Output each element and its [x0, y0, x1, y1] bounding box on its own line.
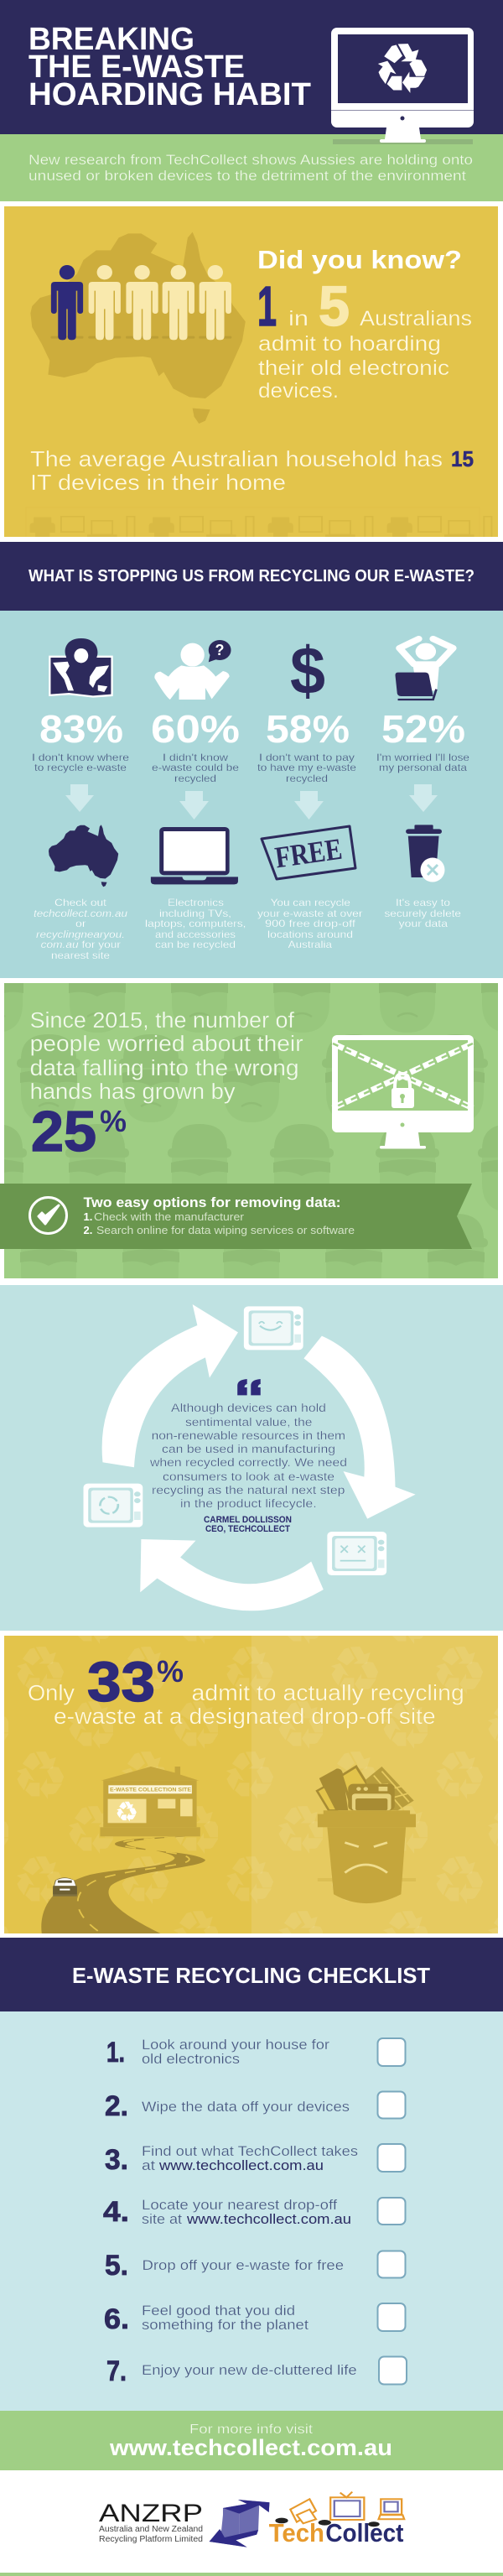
- icon: broken TV: [327, 1532, 386, 1575]
- logo: ANZRP: ANZRP: [99, 2500, 203, 2527]
- item 7: 7.: [106, 2355, 127, 2387]
- stat: 1 in 5 Australians: [257, 275, 472, 403]
- arrows: barrier to solution: [65, 784, 438, 820]
- recycling stat text: Only: [28, 1682, 75, 1705]
- quote text: consumers to look at e-waste: [163, 1470, 334, 1483]
- icon: check circle: [30, 1198, 67, 1233]
- solution text 2: and accessories: [155, 929, 236, 940]
- solution text 1: or: [75, 918, 86, 929]
- icon: recycle TV: [84, 1484, 143, 1527]
- item 3: 3.: [105, 2144, 128, 2176]
- icon: collection site building: [100, 1767, 200, 1836]
- item 5: 5.: [105, 2250, 128, 2282]
- icon: car: [53, 1877, 77, 1897]
- heading: checklist: E-WASTE RECYCLING CHECKLIST: [72, 1963, 430, 1988]
- item 3: at: [142, 2158, 155, 2173]
- solution text 2: [145, 897, 246, 950]
- stat: 1 in 5 Australians: their old electronic: [258, 356, 449, 380]
- icon: ANZRP arrows: [210, 2500, 269, 2547]
- solution text 1: com.au for your: [41, 939, 121, 950]
- solution text 2: including TVs,: [159, 908, 231, 919]
- item 6: 6.: [104, 2303, 129, 2335]
- icon: chained monitor: [332, 1035, 474, 1149]
- barrier text 1: [32, 752, 129, 773]
- item 7: Enjoy your new de-cluttered life: [142, 2363, 357, 2378]
- item 1: 1.: [106, 2037, 125, 2069]
- item 5: Drop off your e-waste for free: [143, 2258, 344, 2273]
- household stat: IT devices in their home: [30, 470, 286, 495]
- icon: laptop: [151, 827, 238, 884]
- item 2: [105, 2090, 406, 2122]
- solution text 3: Australia: [288, 939, 332, 950]
- intro text: New research from TechCollect shows Aussies are holding onto: [29, 152, 473, 168]
- title: [29, 22, 311, 112]
- intro text: [29, 152, 473, 184]
- quote text: Although devices can hold: [171, 1402, 326, 1414]
- item 6: Feel good that you did: [142, 2303, 295, 2318]
- solution text 3: [257, 897, 362, 950]
- icon: stressed person at laptop: [395, 639, 453, 700]
- heading: what is stopping us: [0, 542, 503, 611]
- quote mark: [237, 1379, 261, 1395]
- data worry text: hands has grown by: [30, 1080, 236, 1104]
- barrier text 3: to have my e-waste: [257, 762, 356, 773]
- stat: 83%: 83%: [39, 707, 123, 751]
- icon: sad bin full of e-waste: [317, 1767, 416, 1903]
- recycling stat text: e-waste at a designated drop-off site: [54, 1705, 436, 1729]
- solution text 3: 900 free drop-off: [265, 918, 356, 929]
- barrier text 2: e-waste could be: [152, 762, 239, 773]
- icon: free stamp: FREE: [273, 832, 344, 874]
- quote attribution: CEO, TECHCOLLECT: [205, 1524, 290, 1534]
- item 1: [106, 2037, 406, 2069]
- road with car: [41, 1836, 205, 1933]
- recycling stat text: [28, 1651, 464, 1729]
- heading: checklist: [0, 1938, 503, 2011]
- solution text 4: It's easy to: [396, 897, 450, 908]
- item 4: Locate your nearest drop-off: [142, 2198, 337, 2213]
- band: more info: For more info visit: [189, 2422, 314, 2437]
- ribbon text: 1.: [84, 1210, 92, 1223]
- icon: collection site building: E-WASTE COLLECTION SITE: [110, 1787, 192, 1793]
- intro text: unused or broken devices to the detriment of the environment: [29, 168, 466, 184]
- logo: ANZRP: [99, 2500, 269, 2547]
- solution text 1: [34, 897, 127, 961]
- quote attribution: CARMEL DOLLISSON: [204, 1515, 292, 1525]
- data worry text: people worried about their: [30, 1033, 303, 1056]
- item 6: something for the planet: [142, 2318, 309, 2333]
- panel: did you know: [4, 206, 498, 541]
- solution text 4: your data: [399, 918, 448, 929]
- icon: shrugging person: ?: [215, 642, 225, 658]
- item 4: [103, 2196, 406, 2228]
- recycling stat text: 33: [87, 1651, 155, 1714]
- item 4: www.techcollect.com.au: [186, 2212, 351, 2227]
- stat: 25%: %: [100, 1104, 127, 1138]
- household stat: [30, 446, 474, 495]
- barrier text 1: to recycle e-waste: [34, 762, 127, 773]
- ribbon text: 2.: [84, 1224, 92, 1236]
- barrier text 3: I don't want to pay: [259, 752, 355, 763]
- solution text 2: Electronics: [168, 897, 224, 908]
- logo: ANZRP: Australia and New Zealand: [99, 2525, 203, 2534]
- lifecycle arrows: [102, 1304, 416, 1611]
- item 2: Wipe the data off your devices: [142, 2100, 350, 2115]
- household stat: 15: [451, 446, 474, 471]
- quote text: in the product lifecycle.: [180, 1497, 317, 1510]
- recycling stat text: admit to actually recycling: [191, 1682, 464, 1705]
- header band: [0, 0, 503, 134]
- solution text 3: You can recycle: [271, 897, 350, 908]
- stat: 60%: 60%: [151, 707, 240, 751]
- icon: ants: [275, 2518, 380, 2527]
- item 1: old electronics: [142, 2052, 240, 2067]
- barrier text 2: I didn't know: [163, 752, 228, 763]
- band: more info: [0, 2411, 503, 2470]
- panel: 33 percent recycle: [4, 1636, 498, 1933]
- panel: data security: [0, 983, 498, 1278]
- household stat: The average Australian household has: [30, 446, 443, 471]
- wordmark: Collect: [325, 2518, 403, 2547]
- did you know heading: Did you know?: [257, 245, 462, 274]
- data worry text: Since 2015, the number of: [30, 1009, 295, 1033]
- solution text 1: recyclingnearyou.: [36, 929, 125, 940]
- icon: bin: [406, 825, 444, 882]
- wordmark: [269, 2518, 403, 2547]
- solution text 3: locations around: [267, 929, 353, 940]
- icon: dollar sign: $: [290, 633, 325, 708]
- stat: 1 in 5 Australians: admit to hoarding: [258, 332, 441, 356]
- people: 1 in 5: [50, 265, 231, 340]
- band: more info: www.techcollect.com.au: [109, 2435, 392, 2460]
- ribbon: data removal options: [0, 1184, 472, 1249]
- stat: 25%: [31, 1100, 127, 1163]
- heading: what is stopping us: WHAT IS STOPPING US FROM RECYCLING OUR E-WASTE?: [29, 567, 474, 585]
- barrier text 4: I'm worried I'll lose: [376, 752, 469, 763]
- icon: Australia: [49, 825, 118, 887]
- quote text: recycling as the natural next step: [152, 1484, 345, 1496]
- item 4: site at: [142, 2212, 182, 2227]
- barrier text 4: [376, 752, 469, 773]
- icon: monitor with recycle symbol: [331, 28, 474, 144]
- barrier text 2: [152, 752, 239, 784]
- item 3: www.techcollect.com.au: [158, 2158, 324, 2173]
- barrier text 3: [257, 752, 356, 784]
- data worry text: data falling into the wrong: [30, 1057, 299, 1080]
- stat: 58%: 58%: [266, 707, 350, 751]
- stat: 1 in 5 Australians: devices.: [258, 379, 339, 403]
- stat: 1 in 5 Australians: 1: [257, 275, 277, 338]
- title: HOARDING HABIT: [29, 77, 311, 112]
- quote text: [149, 1402, 347, 1510]
- solution text 1: nearest site: [51, 950, 110, 961]
- barrier text 4: my personal data: [379, 762, 467, 773]
- stat: 1 in 5 Australians: in: [288, 307, 309, 330]
- item 3: [105, 2144, 406, 2176]
- logo: TechCollect: [269, 2492, 404, 2547]
- solution text 1: techcollect.com.au: [34, 908, 127, 919]
- title: BREAKING: [29, 22, 194, 57]
- quote text: when recycled correctly. We need: [149, 1456, 347, 1469]
- wordmark: Tech: [269, 2518, 324, 2547]
- title: THE E-WASTE: [29, 49, 245, 85]
- icon: happy TV: [244, 1306, 303, 1350]
- ribbon text: Check with the manufacturer: [94, 1210, 245, 1223]
- device icon row: [30, 516, 493, 537]
- logo: ANZRP: Recycling Platform Limited: [99, 2535, 203, 2544]
- item 2: 2.: [105, 2090, 128, 2122]
- solution text 2: laptops, computers,: [145, 918, 246, 929]
- barrier text 3: recycled: [286, 773, 328, 784]
- stat: 1 in 5 Australians: 5: [319, 275, 350, 338]
- stat: 25%: 25: [31, 1100, 96, 1163]
- solution text 1: Check out: [54, 897, 107, 908]
- panel: quote and lifecycle: [0, 1285, 503, 1631]
- item 3: Find out what TechCollect takes: [142, 2144, 358, 2159]
- barrier text 2: recycled: [174, 773, 216, 784]
- barrier text 1: I don't know where: [32, 752, 129, 763]
- stat: 1 in 5 Australians: Australians: [360, 307, 472, 330]
- data worry text: [30, 1009, 303, 1104]
- ribbon text: Two easy options for removing data:: [84, 1195, 340, 1210]
- solution text 2: can be recycled: [155, 939, 236, 950]
- solution text 4: [384, 897, 461, 929]
- intro band: [0, 134, 503, 201]
- device icons: [290, 2492, 404, 2523]
- panel: barriers: [0, 611, 503, 978]
- item 5: [105, 2250, 406, 2282]
- quote text: non-renewable resources in them: [152, 1429, 345, 1442]
- item 6: [104, 2303, 406, 2335]
- panel: checklist: [0, 2011, 503, 2411]
- icon: map with pin: [49, 638, 113, 698]
- item 1: Look around your house for: [142, 2037, 330, 2053]
- ribbon text: [84, 1195, 355, 1236]
- icon: shrugging person: [154, 640, 231, 700]
- solution text 3: your e-waste at over: [257, 908, 362, 919]
- item 7: [106, 2355, 407, 2387]
- recycling stat text: %: [157, 1654, 184, 1689]
- item 4: 4.: [103, 2196, 129, 2228]
- stat: 52%: 52%: [381, 707, 465, 751]
- map of Australia: [30, 232, 246, 424]
- quote attribution: [204, 1515, 292, 1534]
- quote text: sentimental value, the: [185, 1416, 312, 1429]
- solution text 4: securely delete: [384, 908, 461, 919]
- quote text: can be used in manufacturing: [162, 1443, 335, 1455]
- ribbon text: Search online for data wiping services or software: [96, 1224, 355, 1236]
- footer strip: [0, 2573, 503, 2576]
